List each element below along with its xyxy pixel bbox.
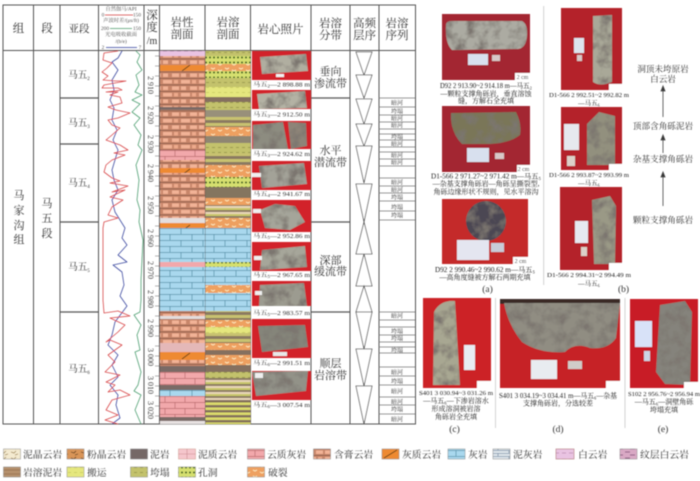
karst sequence rows: 垮塌 (391, 108, 403, 116)
karst sequence rows: 暗河 (391, 368, 403, 376)
column headers: 剖面 (216, 27, 240, 41)
karst zones (314, 64, 347, 382)
karst zones: 潜流带 (314, 155, 347, 169)
karst zones: 顺层 (320, 357, 342, 370)
sub-member names: 马五 (68, 179, 87, 189)
panel dividers (496, 6, 625, 428)
column headers: 岩溶 (216, 15, 240, 29)
column headers: 亚段 (68, 23, 90, 35)
sub-member names: 马五 (68, 71, 87, 81)
karst sequence rows: 垮塌 (391, 133, 403, 141)
log curve legend header: 光电吸收截面 (105, 30, 138, 38)
core caption 5: 马五 (253, 234, 265, 240)
depth scale: 2 950 (146, 196, 155, 214)
core caption 1: 2 (268, 84, 270, 88)
scale a1: 2 cm (517, 75, 529, 81)
karst sequence rows: 垮塌 (391, 346, 403, 354)
column headers: 分带 (319, 28, 342, 42)
legend row 2: 破裂 (268, 466, 288, 479)
column headers (13, 9, 409, 47)
panel b: core photos (547, 8, 631, 295)
photo b1 (561, 8, 622, 90)
scale a2: 2 cm (518, 167, 530, 173)
core caption 3: 马五 (253, 152, 265, 158)
depth scale: 2 980 (146, 290, 155, 308)
core caption 6: 马五 (253, 273, 265, 279)
karst sequence rows: 暗河 (391, 140, 403, 148)
log curve legend header: 声波时差/(μs/ft) (103, 16, 139, 24)
scale a3: 2 cm (515, 259, 527, 265)
caption a1: —颗粒支撑角砾岩，垂直溶蚀 (440, 89, 532, 99)
karst sequence rows: 暗河 (391, 388, 403, 396)
caption b1 (549, 92, 629, 107)
label b: (b) (618, 284, 629, 295)
core photo 1 (252, 51, 311, 80)
karst zones: 垂向 (320, 64, 342, 78)
label d: (d) (552, 424, 564, 435)
core caption 8: 马五 (253, 361, 265, 367)
legend row 2: 搬运 (87, 466, 107, 479)
karst column (206, 51, 250, 424)
formation and member names (14, 189, 52, 246)
column headers: 高频 (353, 16, 376, 30)
depth scale: 2 930 (146, 135, 155, 153)
core caption 3: 3 (268, 153, 270, 158)
core photo 8 (252, 319, 311, 358)
legend (4, 448, 689, 479)
legend row 1: 粉晶云岩 (87, 448, 126, 461)
caption a1 (440, 81, 533, 106)
core caption 6: 5 (268, 274, 270, 279)
log curve legend header: 0 (102, 12, 105, 18)
caption b2 (549, 172, 629, 187)
caption a2: —杂基支撑角砾岩—角砾呈撕裂型, (432, 179, 540, 188)
legend row 1: 泥岩 (150, 448, 170, 461)
log curve legend header: 150 (133, 12, 141, 18)
flow step: undisturbed host rock: 白云岩 (650, 73, 676, 84)
core photo 7 (252, 281, 311, 306)
caption b2: —马五₆ (577, 178, 600, 187)
core photo 5 (252, 200, 311, 232)
core photo 2 (252, 90, 311, 109)
legend row 1: 灰质云岩 (402, 448, 441, 461)
karst sequence rows: 垮塌 (391, 334, 403, 342)
caption e (628, 391, 700, 414)
karst sequence rows: 垮塌 (391, 204, 403, 212)
karst sequence rows: 暗河 (391, 312, 403, 320)
flow step: grain-supported breccia: 颗粒支撑角砾岩 (633, 214, 693, 225)
caption c: 形成溶洞被岩溶 (432, 404, 480, 413)
depth scale: 2 990 (146, 319, 155, 337)
column headers: 度 (146, 20, 158, 34)
high-frequency sequence triangles (356, 52, 372, 424)
caption a3: D92 2 990.46~2 990.62 m—马五₅ (435, 265, 536, 274)
depth scale: 2 920 (146, 106, 155, 124)
core caption 9: 6 (268, 404, 270, 409)
caption b3 (547, 272, 631, 288)
photo e (630, 299, 698, 388)
column headers: 序列 (386, 28, 408, 42)
karst zones: 缓流带 (314, 264, 347, 278)
panel a: core photos (431, 14, 542, 295)
column headers: /m (147, 36, 157, 47)
caption c: 角砾岩全充填 (435, 412, 478, 421)
caption c: S401 3 030.94~3 031.26 m (419, 390, 493, 397)
depth scale: 2 960 (146, 229, 155, 247)
log curve legend header: /(b/e) (115, 38, 127, 45)
photo a1 (442, 14, 530, 80)
label a: (a) (482, 284, 493, 295)
depth scale: 3 000 (146, 348, 155, 366)
core caption 5: 5 (268, 235, 270, 240)
photo c (423, 298, 491, 388)
karst zones: 渗流带 (314, 76, 347, 90)
legend row 1: 泥晶云岩 (23, 448, 62, 461)
caption d: 支撑角砾岩，分选较差 (523, 398, 593, 408)
legend row 2: 孔洞 (198, 466, 218, 479)
stratigraphic column table (3, 4, 416, 424)
flow step: undisturbed host rock (637, 63, 689, 84)
caption c: —马五₆—下渗岩溶水 (422, 396, 489, 405)
core caption 1: —2 898.88 m (269, 82, 310, 88)
karst sequence flow (633, 63, 693, 225)
depth scale: 2 940 (146, 164, 155, 182)
caption c (419, 390, 493, 421)
core caption 2: 马五 (253, 112, 265, 118)
core caption 8: —2 991.51 m (269, 361, 310, 367)
core caption 2: —2 912.50 m (269, 112, 310, 118)
karst zones: 岩溶带 (314, 368, 347, 382)
karst sequence rows: 暗河 (391, 178, 403, 186)
column headers: 深 (146, 9, 158, 22)
photo a3 (442, 199, 528, 264)
karst sequence rows: 暗河 (391, 122, 403, 130)
core caption 7: —2 983.57 m (269, 311, 310, 317)
caption a3 (435, 265, 536, 282)
formation and member names: 段 (42, 227, 52, 240)
legend row 2: 垮塌 (150, 466, 170, 479)
caption b1: D1-566 2 992.51~2 992.82 m (549, 92, 629, 99)
karst sequence rows: 暗河 (391, 152, 403, 160)
core photo 6 (252, 242, 311, 271)
sub-member names: 2 (87, 77, 90, 82)
depth scale: 2 910 (146, 76, 155, 94)
karst sequence rows: 暗河 (391, 114, 403, 122)
log curve legend header: 200 (101, 26, 109, 32)
legend row 1: 泥质云岩 (198, 448, 237, 461)
caption a3: —高角度缝被方解石两期充填 (438, 272, 531, 282)
caption b2: D1-566 2 993.87~2 993.99 m (549, 172, 629, 179)
sub-member names: 4 (87, 185, 90, 190)
core photo 3 (252, 121, 311, 149)
formation and member names: 马 (42, 197, 52, 210)
core caption 1: 马五 (253, 82, 265, 88)
panel c: core photo (419, 298, 493, 435)
formation and member names: 组 (14, 233, 24, 246)
core caption 3: —2 924.62 m (269, 152, 310, 158)
karst sequence rows (379, 98, 415, 424)
caption d: S401 3 034.19~3 034.41 m—马五₆—杂基 (499, 391, 617, 400)
sub-member names: 马五 (68, 365, 87, 375)
core caption 7: 5 (268, 312, 270, 317)
formation and member names: 五 (42, 212, 52, 225)
photo a2 (442, 106, 530, 172)
arrow up 1 (661, 86, 665, 117)
caption e: —马五₆—洞壁角砾 (634, 397, 694, 406)
table frame and grid (3, 5, 416, 424)
legend row 1: 纹层白云岩 (640, 448, 689, 461)
flow step: matrix-supported breccia: 杂基支撑角砾岩 (633, 153, 693, 164)
caption b3: —马五₆ (577, 278, 600, 288)
column headers: 岩溶 (319, 16, 342, 30)
karst sequence rows: 垮塌 (391, 406, 403, 414)
depth scale: 3 010 (146, 376, 155, 394)
caption a2 (431, 172, 542, 197)
caption a1: 缝，方解石全充填 (458, 96, 515, 106)
formation and member names: 沟 (14, 218, 24, 232)
legend row 1: 白云岩 (578, 448, 608, 461)
caption a2: 角砾边缘形状不规则，见水平溶沟 (434, 187, 538, 197)
label e: (e) (658, 424, 668, 435)
karst zones: 水平 (320, 143, 342, 157)
sub-member names: 5 (87, 269, 90, 274)
sub-member names: 6 (87, 371, 90, 376)
arrow up 2 (661, 135, 665, 153)
core caption 4: 4 (268, 193, 270, 198)
karst sequence rows: 暗河 (391, 416, 403, 424)
karst sequence rows: 暗河 (391, 398, 403, 406)
depth scale: 3 020 (146, 401, 155, 419)
core caption 7: 马五 (253, 311, 265, 317)
legend row 2: 岩溶泥岩 (23, 466, 62, 479)
formation and member names: 家 (14, 203, 24, 217)
log curve legend header: 2 (102, 45, 105, 51)
sub-member names: 马五 (68, 119, 87, 129)
log curve legend header: 7 (139, 45, 142, 51)
karst sequence rows: 垮塌 (391, 378, 403, 386)
panel e: core photo (628, 299, 700, 435)
karst sequence rows: 暗河 (391, 186, 403, 194)
log curve legend header: 自然伽马/API (105, 4, 137, 12)
caption a1: D92 2 913.90~2 914.18 m—马五₂ (440, 81, 533, 90)
legend row 1: 含膏云岩 (334, 448, 373, 461)
core photo strip (252, 51, 311, 409)
arrow up 3 (661, 172, 665, 206)
column headers: 岩溶 (386, 16, 409, 30)
log curve legend header: 150 (133, 26, 141, 32)
flow step: top breccia mudstone: 顶部含角砾泥岩 (633, 120, 693, 131)
caption b3: D1-566 2 994.31~2 994.49 m (547, 272, 631, 279)
karst sequence rows: 暗河 (391, 158, 403, 166)
flow step: undisturbed host rock: 洞顶未垮原岩 (637, 63, 689, 74)
caption e: S102 2 956.76~2 956.94 m (628, 391, 700, 398)
core caption 2: 3 (268, 114, 270, 118)
depth scale: 2 970 (146, 261, 155, 279)
column headers: 段 (41, 22, 53, 35)
legend row 1: 泥灰岩 (513, 448, 543, 461)
karst zones: 深部 (320, 254, 342, 267)
core photo 9 (252, 371, 311, 400)
column headers: 剖面 (170, 27, 194, 41)
photo d (500, 299, 620, 388)
sub-member names (68, 70, 90, 376)
photo b3 (560, 187, 622, 270)
caption b1: —马五₆ (577, 98, 600, 107)
photo b2 (561, 107, 622, 170)
caption a2: D1-566 2 971.27~2 971.42 m—马五₅ (431, 172, 542, 180)
core caption 8: 6 (268, 362, 270, 367)
core caption 5: —2 952.86 m (269, 234, 310, 240)
legend row 1: 云质灰岩 (267, 448, 306, 461)
core caption 4: —2 941.67 m (269, 192, 310, 198)
formation and member names: 马 (14, 189, 24, 202)
core caption 4: 马五 (253, 192, 265, 198)
depth scale (146, 56, 159, 419)
core caption 9: 马五 (253, 403, 265, 409)
panel d: core photo (499, 299, 620, 435)
core caption 6: —2 967.65 m (269, 273, 310, 279)
sub-member names: 3 (87, 125, 90, 130)
karst sequence rows: 垮塌 (391, 328, 403, 336)
core photo 4 (252, 161, 311, 190)
legend row 1 (4, 448, 689, 461)
column headers: 组 (13, 22, 25, 35)
legend row 1: 灰岩 (468, 448, 488, 461)
lithology column (160, 51, 205, 424)
caption d (499, 391, 617, 408)
column headers: 岩性 (170, 15, 194, 29)
log curve legend header (101, 4, 142, 51)
column headers: 层序 (353, 28, 376, 42)
label c: (c) (449, 424, 460, 435)
karst sequence rows: 暗河 (391, 99, 403, 107)
karst sequence rows: 垮塌 (391, 212, 403, 220)
core caption 9: —3 007.54 m (269, 403, 310, 409)
legend row 2 (4, 466, 288, 479)
karst sequence rows: 垮塌 (391, 194, 403, 202)
sub-member names: 马五 (68, 263, 87, 273)
caption e: 垮塌充填 (650, 405, 679, 414)
well log curves (102, 51, 143, 424)
column headers: 岩心照片 (258, 22, 304, 36)
